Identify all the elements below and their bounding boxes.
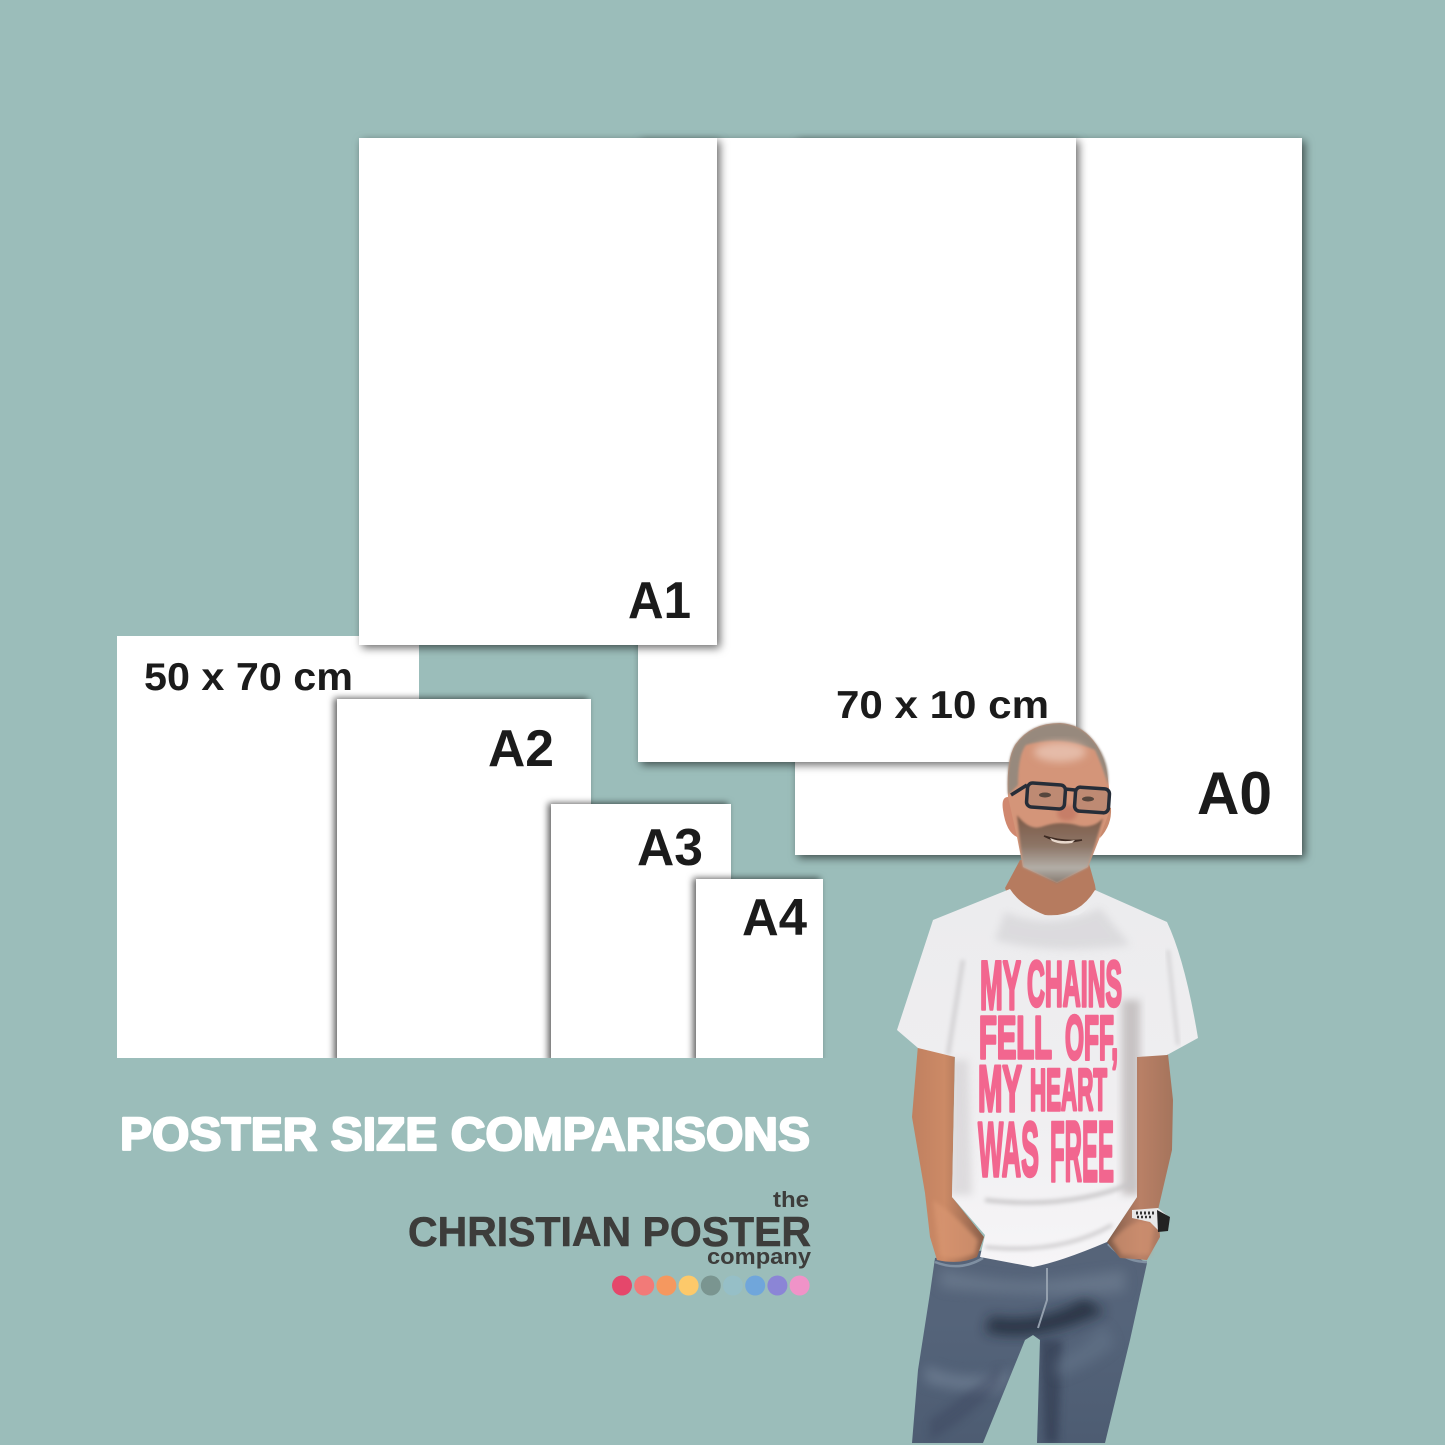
- forehead highlight: [1034, 742, 1086, 762]
- T-shirt: HEART: [1030, 1058, 1107, 1123]
- nose: [1057, 805, 1077, 821]
- jeans: [912, 1240, 1147, 1443]
- shirt slogan: FELL: [979, 1005, 1052, 1071]
- face and scalp: [1008, 723, 1110, 883]
- panel: A4 poster: [696, 879, 823, 1064]
- label: 70 x 10 cm: 70 x 10 cm: [836, 684, 1049, 727]
- logo word: company: company: [707, 1244, 812, 1269]
- label: A3: A3: [637, 819, 703, 877]
- right arm: [1107, 1045, 1173, 1260]
- panel: A1 poster: [359, 138, 717, 645]
- label: A1: A1: [628, 572, 691, 630]
- shirt slogan: WAS: [978, 1107, 1039, 1193]
- T-shirt: CHAINS: [1027, 948, 1122, 1020]
- T-shirt: [897, 889, 1198, 1267]
- stubble hair: [1008, 723, 1108, 795]
- label: A2: A2: [488, 720, 554, 778]
- title: POSTER SIZE COMPARISONS: [120, 1108, 810, 1160]
- label: 50 x 70 cm: 50 x 70 cm: [144, 656, 353, 699]
- logo colour dots: [612, 1276, 810, 1296]
- neck: [1005, 860, 1098, 916]
- T-shirt: FREE: [1050, 1105, 1114, 1200]
- shirt slogan: MY: [978, 1052, 1022, 1125]
- beard: [1017, 815, 1103, 883]
- panel: 70 x 100 cm poster: [638, 138, 1076, 762]
- panel: A3 poster: [551, 804, 731, 1064]
- glasses: [1011, 783, 1110, 813]
- wristwatch: [1132, 1208, 1170, 1232]
- illustration: man in white T-shirt and jeans: [897, 723, 1198, 1443]
- head: [1003, 723, 1111, 883]
- logo word: the: the: [773, 1187, 809, 1212]
- logo: The Christian Poster Company: [408, 1187, 812, 1296]
- T-shirt: OFF,: [1065, 1004, 1118, 1073]
- logo word: Christian Poster: CHRISTIAN POSTER: [408, 1208, 811, 1255]
- shirt slogan: MY: [980, 947, 1021, 1024]
- eyes: [1039, 792, 1051, 798]
- panel: 50 x 70 cm poster: [117, 636, 419, 1059]
- panel: A0 poster: [795, 138, 1302, 855]
- smile: [1044, 836, 1082, 842]
- label: A4: A4: [742, 889, 807, 947]
- label: A0: A0: [1197, 760, 1272, 827]
- left arm: [912, 1045, 984, 1262]
- shirt slogan: [978, 947, 1122, 1200]
- panel: A2 poster: [337, 699, 591, 1064]
- ears: [1003, 797, 1020, 837]
